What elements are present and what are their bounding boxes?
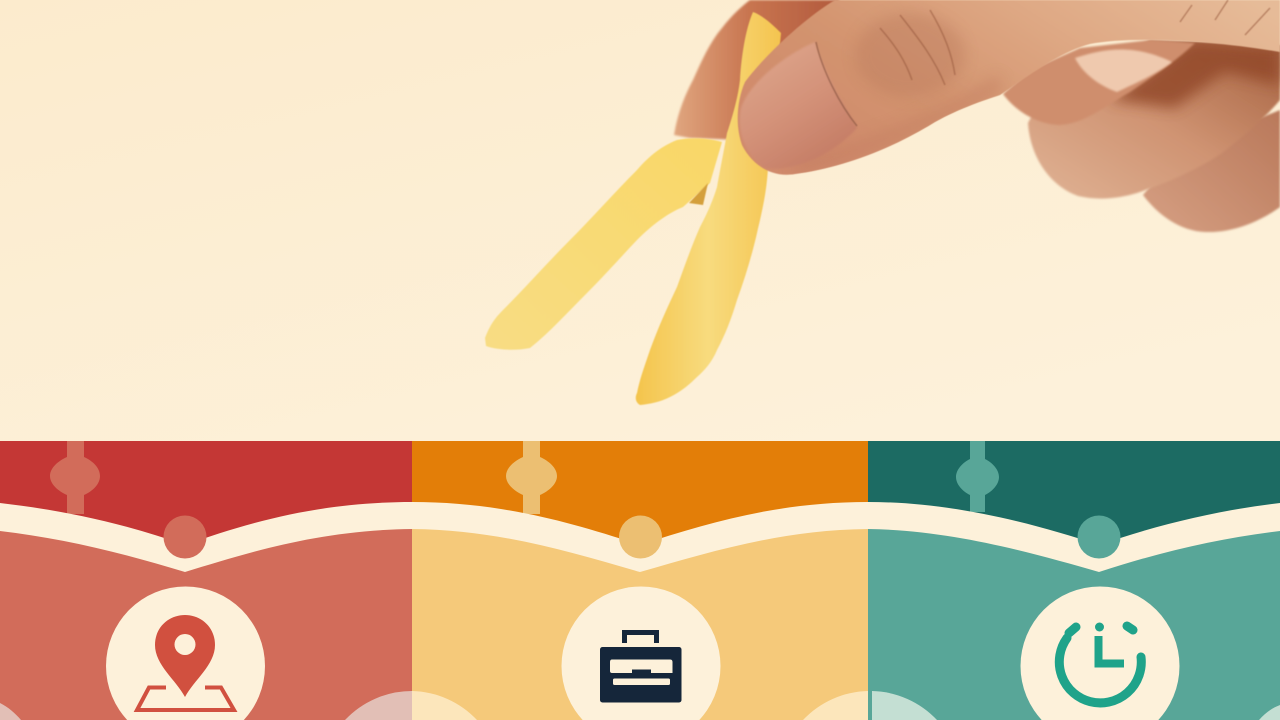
icon: briefcase body bbox=[600, 647, 682, 702]
icon: briefcase strip bbox=[613, 678, 670, 685]
orange lollipop marker bbox=[506, 441, 557, 514]
panel: orange bbox=[412, 441, 868, 720]
icon: map base bbox=[137, 688, 234, 710]
teal header bbox=[868, 441, 1280, 561]
thumb bbox=[738, 0, 1280, 175]
location icon badge bbox=[106, 586, 265, 720]
icon: location pin bbox=[155, 615, 215, 697]
orange body bbox=[412, 528, 868, 720]
red body bbox=[0, 528, 412, 720]
left fry bbox=[485, 138, 722, 350]
icon: briefcase handle bbox=[624, 632, 656, 643]
middle fingernail bbox=[1075, 50, 1172, 92]
right fry bbox=[636, 12, 781, 405]
thumb nail bbox=[740, 42, 857, 169]
cream wave divider bbox=[0, 502, 1280, 572]
photo background bbox=[0, 0, 1280, 441]
red node circle bbox=[164, 516, 206, 558]
icon: clock hands bbox=[1098, 636, 1124, 664]
icon: briefcase inner panel bbox=[610, 660, 672, 673]
icon: clock ring bbox=[1059, 638, 1141, 703]
thumb shading bbox=[790, 13, 1000, 178]
icon: clock ticks bbox=[1069, 626, 1133, 633]
teal body bbox=[868, 528, 1280, 720]
teal node circle bbox=[1078, 516, 1120, 558]
ring finger knuckle shadow bbox=[1110, 40, 1280, 108]
red bottom corner circles bbox=[345, 691, 412, 720]
panel: teal bbox=[868, 441, 1280, 720]
icon: top dot bbox=[1095, 622, 1104, 632]
red header bbox=[0, 441, 412, 561]
teal lollipop marker bbox=[956, 441, 999, 512]
teal bottom corner circles bbox=[872, 691, 937, 720]
nail crease bbox=[816, 42, 857, 126]
orange header bbox=[412, 441, 868, 561]
panel: red bbox=[0, 441, 412, 720]
photo: hand holding fries bbox=[485, 0, 1280, 405]
index finger behind fries bbox=[674, 0, 840, 140]
red lollipop marker bbox=[50, 441, 100, 514]
ring finger bbox=[1028, 40, 1280, 199]
clock icon badge bbox=[1020, 586, 1180, 720]
orange bottom corner circles bbox=[412, 691, 477, 720]
fry fold shadow bbox=[689, 183, 708, 205]
pinky finger bbox=[1143, 110, 1280, 232]
knuckle wrinkles bbox=[880, 0, 1270, 85]
middle finger bbox=[1003, 40, 1195, 125]
briefcase icon badge bbox=[562, 586, 720, 720]
orange node circle bbox=[619, 516, 662, 558]
